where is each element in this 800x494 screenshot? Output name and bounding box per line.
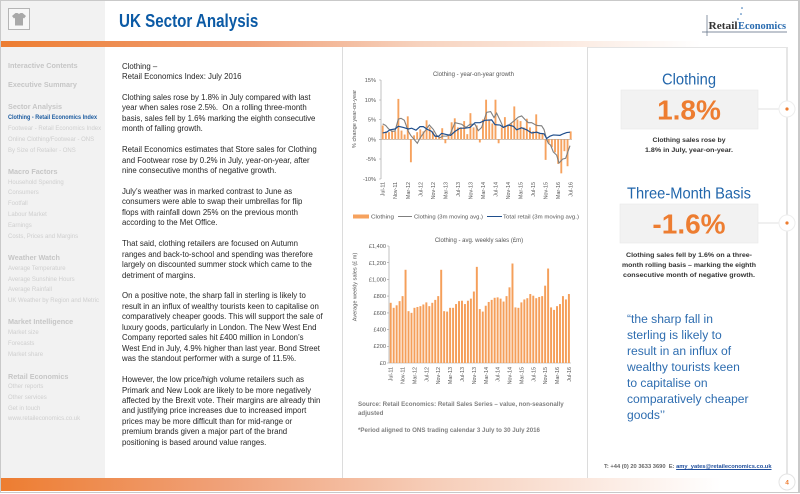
source note [358,401,564,434]
panel: body text: West End in July, 4.9% higher than last year. Bond Street [122,343,319,353]
sidebar navigation: Average Rainfall [8,286,52,293]
chart: clothing year-on-year growth: Mar-13 [443,182,449,199]
chart: clothing avg weekly sales: Jul-11 [389,367,395,381]
sidebar navigation: Online Clothing/Footwear - ONS [8,136,94,142]
sidebar navigation: Market size [8,329,39,336]
chart: clothing year-on-year growth: Nov-15 [544,182,550,199]
chart: clothing avg weekly sales: £400 [374,328,386,334]
logo: Retail Economics [702,7,787,36]
panel: body text: prices may be more difficult than for mid-range or [122,416,292,426]
sidebar navigation: Average Temperature [8,264,66,272]
panel: body text: July’s weather was in marked contrast to June as [122,186,292,196]
KPI: three-month basis: consecutive month of negative growth. [623,272,755,279]
panel: key figures [588,47,788,478]
header orange bar [1,41,701,47]
chart: clothing avg weekly sales: Nov-11 [401,367,407,384]
chart: clothing avg weekly sales: Nov-13 [472,367,478,384]
sidebar navigation: Market share [8,350,43,358]
panel: body text: Company reported sales hit £400 million in London’s [122,332,303,342]
chart: clothing year-on-year growth: % change year-on-year [352,90,358,148]
sidebar navigation: Sector Analysis [8,102,62,110]
chart: clothing year-on-year growth: Clothing - year-on-year growth [433,72,514,78]
sidebar navigation: Retail Economics [8,372,68,380]
panel: body text: comparatively cheaper goods. This will support the sale of [122,311,322,321]
pull quote: comparatively cheaper [627,392,749,406]
panel: body text: positioning is based around value ranges. [122,437,266,447]
sidebar navigation: Forecasts [8,340,34,347]
chart: clothing year-on-year growth: Jul-16 [569,182,575,197]
chart: clothing avg weekly sales: £1,200 [369,261,386,267]
chart: clothing year-on-year growth: -5% [366,157,376,163]
sidebar navigation: Weather Watch [8,252,60,262]
contact details: T: +44 (0) 20 3633 3690 E: amy_yates@retaileconomics.co.uk [604,464,772,470]
chart: clothing avg weekly sales: £1,400 [369,244,386,250]
panel: body text: result in an influx of wealthy tourists keen to capitalise on [122,301,318,311]
chart: clothing avg weekly sales: £1,000 [369,278,386,284]
chart: clothing avg weekly sales: Mar-14 [484,367,490,384]
KPI: clothing: Clothing sales rose by [652,137,726,144]
chart: clothing avg weekly sales: Nov-15 [543,367,549,384]
pull quote: goods’’ [627,408,665,422]
panel: body text: largely on discounted summer stock which came to the [122,259,311,269]
chart: clothing avg weekly sales: Jul-16 [567,367,573,382]
sidebar navigation: Executive Summary [8,80,77,89]
panel: body text: basis, sales fell by 1.6% marking the eighth consecutive [122,113,315,123]
source note: *Period aligned to ONS trading calendar 3 July to 30 July 2016 [358,427,540,434]
page number: 4 [785,480,789,486]
pull quote [627,312,749,422]
chart: clothing avg weekly sales: Mar-15 [519,367,525,384]
chart: clothing avg weekly sales: Jul-13 [460,367,466,382]
chart: clothing year-on-year growth: Nov-11 [393,182,399,199]
source note: adjusted [358,410,383,417]
sidebar navigation: By Size of Retailer - ONS [8,146,76,154]
KPI: three-month basis [620,186,778,279]
panel: body text: Clothing sales rose by 1.8% in July compared with last [122,92,310,102]
sidebar navigation: Macro Factors [8,166,58,176]
legend: Total retail (3m moving avg.) [503,214,579,220]
pull quote: result in an influx of [627,344,731,358]
chart: clothing year-on-year growth: Jul-14 [494,182,500,197]
panel: body text: Retail Economics Index: July 2016 [122,71,241,81]
pull quote: sterling is likely to [627,328,722,342]
sidebar navigation: Footwear - Retail Economics Index [8,124,101,132]
KPI: three-month basis: Clothing sales fell by 1.6% on a three- [626,252,752,259]
legend [353,214,579,220]
legend: Clothing (3m moving avg.) [414,214,483,220]
KPI: three-month basis: Three-Month Basis [627,186,751,202]
connector dots [778,100,796,232]
panel: body text: luxury goods, particularly in London. The New West End [122,322,316,332]
logo: Retail Economics: Retail [708,21,738,32]
chart: clothing year-on-year growth: Nov-14 [506,182,512,199]
footer orange bar [1,478,721,491]
sidebar navigation: Interactive Contents [8,60,78,70]
sidebar navigation: Average Sunshine Hours [8,276,75,282]
chart: clothing year-on-year growth: Jul-11 [381,182,387,196]
sidebar panel [1,0,105,478]
sidebar navigation: Other services [8,394,47,400]
sidebar navigation: UK Weather by Region and Metric [8,296,99,304]
panel: charts [342,47,588,478]
panel: body text: premium brands given a major part of the brand [122,426,287,436]
panel: body text: Retail Economics estimates that Store sales for Clothing [122,144,316,154]
chart: clothing year-on-year growth: Jul-13 [456,182,462,197]
chart: clothing year-on-year growth: Mar-16 [556,182,562,199]
panel: body text [122,60,323,447]
chart: clothing avg weekly sales: £0 [380,361,386,367]
panel: body text: ranges and back-to-school and spending was therefore [122,249,312,259]
chart: clothing avg weekly sales: Jul-15 [531,367,537,382]
sidebar navigation: Clothing - Retail Economics Index [8,114,97,121]
panel: body text: affected by the Brexit vote. Their margins are already thin [122,395,320,405]
sidebar navigation: www.retaileconomics.co.uk [8,415,80,422]
sidebar navigation: Labour Market [8,210,47,218]
chart: clothing year-on-year growth: Mar-15 [518,182,524,199]
icon: t-shirt [8,8,30,30]
chart: clothing avg weekly sales: £200 [374,344,386,350]
KPI: clothing: 1.8% in July, year-on-year. [645,147,733,154]
panel: body text: nine consecutive months of negative growth. [122,165,276,175]
KPI: clothing [620,72,778,154]
sidebar navigation: Market Intelligence [8,317,73,326]
page title: UK Sector Analysis [119,11,258,31]
chart: clothing avg weekly sales: Jul-14 [496,367,502,382]
chart: clothing avg weekly sales: Average weekly sales (£ m) [352,253,358,321]
panel: body text: That said, clothing retailers are focused on Autumn [122,238,298,248]
chart: clothing year-on-year growth: 10% [365,98,376,104]
logo: Retail Economics: Economics [738,21,786,32]
sidebar navigation: Other reports [8,382,43,390]
chart: clothing avg weekly sales: Clothing - avg. weekly sales (£m) [435,238,523,244]
page number [778,474,796,490]
chart: clothing year-on-year growth [352,72,579,220]
sidebar navigation: Consumers [8,189,39,196]
KPI: three-month basis: month rolling basis – marking the eighth [622,262,756,269]
panel: body text: flops with rainfall down 25% on the previous month [122,207,298,217]
sidebar navigation: Get in touch [8,404,40,412]
chart: clothing avg weekly sales: £800 [374,294,386,300]
KPI: clothing: 1.8% [657,94,721,126]
chart: clothing avg weekly sales: Mar-12 [412,367,418,384]
panel: body text: according to the Met Office. [122,217,217,227]
KPI: clothing: Clothing [662,72,716,88]
panel: body text: consumers were able to swap their umbrellas for flip [122,196,302,206]
chart: clothing avg weekly sales: Mar-16 [555,367,561,384]
chart: clothing year-on-year growth: Jul-15 [531,182,537,197]
chart: clothing avg weekly sales [352,238,573,384]
sidebar navigation: Costs, Prices and Margins [8,232,78,240]
panel: body text: However, the low price/high volume retailers such as [122,374,304,384]
pull quote: wealthy tourists keen [627,360,740,374]
chart: clothing avg weekly sales: £600 [374,311,386,317]
panel: body text: and justifying price increases due to increased import [122,405,306,415]
chart: clothing year-on-year growth: Nov-12 [431,182,437,199]
chart: clothing year-on-year growth: 0% [368,137,376,143]
KPI: three-month basis: -1.6% [652,208,726,240]
sidebar navigation [8,60,101,422]
panel: body text: and Footwear rose by 0.2% in July, year-on-year, after [122,155,309,165]
chart: clothing year-on-year growth: Mar-14 [481,182,487,199]
chart: clothing avg weekly sales: Jul-12 [424,367,430,382]
chart: clothing year-on-year growth: Mar-12 [406,182,412,199]
sidebar navigation: Footfall [8,200,28,206]
chart: clothing year-on-year growth: 5% [368,118,376,124]
panel: body text: Clothing – [122,60,157,70]
chart: clothing year-on-year growth: Nov-13 [468,182,474,199]
chart: clothing year-on-year growth: 15% [365,78,376,84]
chart: clothing avg weekly sales: Mar-13 [448,367,454,384]
chart: clothing avg weekly sales: Nov-12 [436,367,442,384]
chart: clothing year-on-year growth: Jul-12 [418,182,424,197]
sidebar navigation: Earnings [8,222,32,228]
panel: body text: month of falling growth. [122,123,202,133]
panel: body text: Primark and New Look are likely to be more negatively [122,385,311,395]
pull quote: “the sharp fall in [627,312,713,326]
panel: body text: year when sales rose 2.5%. On a rolling three-month [122,102,306,112]
chart: clothing avg weekly sales: Nov-14 [508,367,514,384]
source note: Source: Retail Economics: Retail Sales Series – value, non-seasonally [358,401,564,408]
chart: clothing year-on-year growth: -10% [363,177,376,183]
sidebar navigation: Household Spending [8,178,64,186]
panel: body text: detriment of margins. [122,270,195,280]
legend: Clothing [371,214,394,220]
panel: body text: was the standout performer with a surge of 11.5%. [122,353,296,363]
pull quote: to capitalise on [627,376,708,390]
panel: body text: On a positive note, the sharp fall in sterling is likely to [122,290,305,300]
